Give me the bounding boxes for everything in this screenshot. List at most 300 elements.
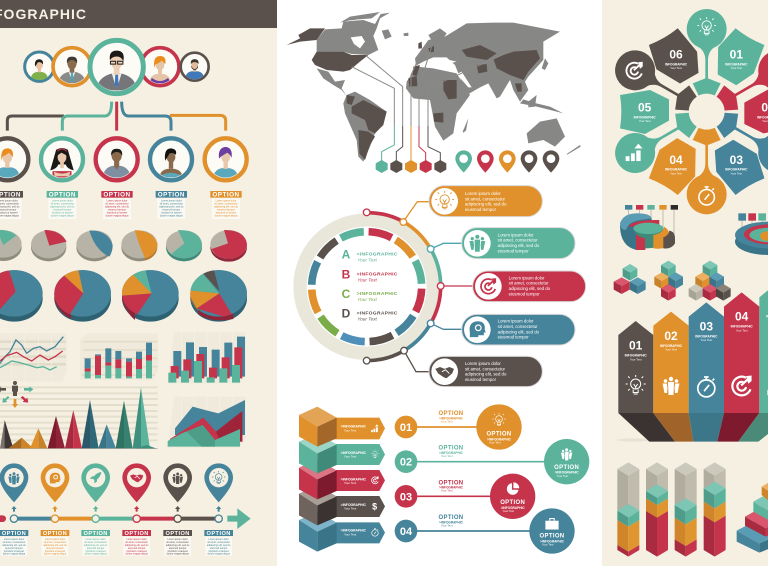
column 03 xyxy=(689,302,724,413)
label 03: 03 xyxy=(730,153,743,167)
legend C xyxy=(342,287,398,302)
large pie 4 xyxy=(190,270,247,322)
timeline option 1: dolore magna aliqua xyxy=(3,553,26,556)
pill: orange: Lorem ipsum dolor xyxy=(465,191,501,196)
avatar: woman small xyxy=(25,52,54,81)
column 01: INFOGRAPHIC xyxy=(625,354,647,358)
option row 03: Your Text xyxy=(441,489,453,493)
timeline option 6: sit amet, consectetur xyxy=(207,541,230,544)
option 1 xyxy=(0,191,23,219)
timeline option 4: sit amet, consectetur xyxy=(125,541,148,544)
option row 04: Your Text xyxy=(441,523,453,527)
pill: brown: Lorem ipsum dolor xyxy=(465,361,501,366)
pill: orange xyxy=(429,186,542,217)
column 02: Your Text xyxy=(665,348,677,352)
arrow label orange xyxy=(335,418,385,439)
option row 03: Your Text xyxy=(503,509,514,513)
pill: orange: eiusmod tempor xyxy=(465,207,497,212)
cube clusters xyxy=(614,261,731,301)
option 2: dolore magna aliqua xyxy=(51,215,74,218)
beige ring xyxy=(300,220,433,353)
ring segments xyxy=(291,211,442,362)
stacked bar chart xyxy=(80,333,158,380)
cube red xyxy=(299,459,337,499)
pill: teal: adipiscing elit, sed do xyxy=(498,243,540,248)
arrow label red: >INFOGRAPHIC xyxy=(341,477,367,481)
arc nodes xyxy=(363,209,444,364)
timeline option 4: OPTION xyxy=(125,531,149,537)
small pie 4 xyxy=(121,230,157,261)
pill: red xyxy=(473,271,586,302)
option 4: tincidunt ut laoreet xyxy=(161,211,182,214)
icon: person with arrows xyxy=(0,381,33,408)
map inland seas xyxy=(420,59,472,87)
map pin brown 2 xyxy=(543,150,559,173)
option row 04: 04 xyxy=(400,526,413,538)
timeline option 6: Lorem ipsum dolor xyxy=(209,538,229,541)
pill: blue: Lorem ipsum dolor xyxy=(498,319,534,324)
map pin brown xyxy=(521,150,537,173)
label 06: Your Text xyxy=(670,66,682,70)
legend A B C D xyxy=(342,247,398,321)
pill: brown xyxy=(429,356,542,387)
connectors xyxy=(403,202,473,372)
radial bar chart right xyxy=(735,213,768,255)
avatar: man with beard xyxy=(181,53,209,81)
pill: teal xyxy=(462,228,575,259)
label 05: Your Text xyxy=(639,119,651,123)
label 02 xyxy=(757,101,768,123)
option row 02: 02 xyxy=(400,457,412,469)
option row 03: 03 xyxy=(400,491,412,503)
legend D: >INFOGRAPHIC xyxy=(357,310,398,316)
option 4: dolore magna aliqua xyxy=(160,215,183,218)
option 2: adipiscing elit, sed do xyxy=(50,205,75,208)
wedge and pin teal top xyxy=(687,9,727,98)
option 3: eiusmod tempor xyxy=(108,208,126,211)
option row 03: OPTION xyxy=(500,500,525,506)
3D bar chart xyxy=(167,332,246,383)
timeline option 5: sit amet, consectetur xyxy=(166,541,189,544)
option row 01: Your Text xyxy=(489,441,501,445)
option row 01: >INFOGRAPHIC xyxy=(439,417,464,421)
pin: worker xyxy=(163,463,192,502)
timeline option 3: sit amet, consectetur xyxy=(84,541,107,544)
option 3: adipiscing elit, sed do xyxy=(105,205,130,208)
arrow label teal: >INFOGRAPHIC xyxy=(341,451,367,455)
timeline option 3: tincidunt ut laoreet xyxy=(86,550,106,553)
timeline option 5: Lorem ipsum dolor xyxy=(168,538,188,541)
timeline option 6: tincidunt ut laoreet xyxy=(209,550,229,553)
stacked 3D bar 1 xyxy=(617,462,639,557)
timeline option 2: adipiscing elit, sed do xyxy=(43,544,67,547)
timeline option 3: Lorem ipsum dolor xyxy=(86,538,106,541)
timeline option 4 xyxy=(122,530,151,556)
legend B: B xyxy=(342,267,351,281)
timeline option 1: adipiscing elit, sed do xyxy=(2,544,26,547)
timeline option labels xyxy=(0,530,233,556)
pill: teal: eiusmod tempor xyxy=(498,248,529,253)
option row 01: OPTION xyxy=(439,411,463,417)
option 4: Lorem ipsum dolor xyxy=(161,199,182,202)
pin: handshake xyxy=(122,463,151,502)
wedge and pin teal left xyxy=(608,101,705,180)
label 04 xyxy=(665,153,688,175)
timeline option 1: eiusmod tempor xyxy=(5,547,23,550)
option 4: sit amet, consectetur xyxy=(160,202,183,205)
map connector lines xyxy=(352,47,513,161)
timeline option 2: OPTION xyxy=(43,531,67,537)
option row 02: OPTION xyxy=(439,445,463,451)
avatar: woman with short black hair xyxy=(150,138,192,180)
panel: hexagon flower diagram xyxy=(608,9,768,301)
option 2: eiusmod tempor xyxy=(53,208,72,211)
arrow label blue: >INFOGRAPHIC xyxy=(341,529,367,533)
column floors xyxy=(618,413,768,442)
option 4: adipiscing elit, sed do xyxy=(159,205,184,208)
legend A xyxy=(342,247,398,263)
option 5 xyxy=(210,191,242,219)
map gray countries xyxy=(317,12,581,162)
option row 04: >INFOGRAPHIC xyxy=(540,540,565,544)
column 04 xyxy=(724,292,759,413)
cube teal xyxy=(299,433,337,473)
avatar: long black hair xyxy=(41,138,83,180)
stepped pyramid xyxy=(737,482,768,553)
option row 04: OPTION xyxy=(439,515,463,521)
label 01: Your Text xyxy=(731,66,742,70)
label 03: Your Text xyxy=(731,171,742,175)
option row 02 xyxy=(395,439,589,484)
large pie charts xyxy=(0,265,247,322)
pin: rocket xyxy=(81,463,110,502)
legend D: D xyxy=(342,306,351,320)
legend A: Your Text xyxy=(357,258,378,263)
option row 03: >INFOGRAPHIC xyxy=(501,506,525,510)
map hexagon markers xyxy=(376,160,446,173)
option 3: sit amet, consectetur xyxy=(105,202,129,205)
timeline option 3: eiusmod tempor xyxy=(87,547,105,550)
option 3: Lorem ipsum dolor xyxy=(107,199,128,202)
legend A: >INFOGRAPHIC xyxy=(357,252,398,258)
option row 03: OPTION xyxy=(439,480,463,486)
option row 02: >INFOGRAPHIC xyxy=(555,471,579,475)
pill: blue xyxy=(462,314,575,345)
pill: brown: eiusmod tempor xyxy=(465,377,497,382)
stacked 3D bar 2 xyxy=(646,462,668,557)
option row 02: Your Text xyxy=(557,474,568,478)
pill: brown: adipiscing elit, sed do xyxy=(465,372,507,377)
option 4: OPTION xyxy=(158,191,185,198)
option row 01: OPTION xyxy=(487,432,511,438)
arrow label red xyxy=(335,470,385,491)
panel: cube stack and options xyxy=(299,404,589,554)
flower icons xyxy=(626,17,716,205)
avatar: dark skinned man xyxy=(96,138,138,180)
timeline option 2: Lorem ipsum dolor xyxy=(45,538,65,541)
small pie 2 xyxy=(31,230,67,261)
label 03 xyxy=(725,153,748,175)
legend D xyxy=(342,306,398,321)
timeline xyxy=(0,506,251,529)
large pie 1 xyxy=(0,265,43,322)
timeline option 5: eiusmod tempor xyxy=(169,547,187,550)
cube cluster 3 xyxy=(689,261,731,301)
map highlighted countries xyxy=(287,28,540,160)
timeline option 2: dolore magna aliqua xyxy=(44,553,67,556)
map pin legend xyxy=(455,150,559,173)
pill: red: Lorem ipsum dolor xyxy=(509,275,545,280)
pill: orange: sit amet, consectetur xyxy=(465,196,505,201)
timeline option 5: dolore magna aliqua xyxy=(167,553,189,556)
legend D: Your Text xyxy=(357,316,378,321)
pin: people xyxy=(0,463,28,502)
option row 02: Your Text xyxy=(441,454,453,458)
arrow label brown: >INFOGRAPHIC xyxy=(341,503,367,507)
pill: blue: sit amet, consectetur xyxy=(498,324,538,329)
timeline option 6: dolore magna aliqua xyxy=(208,553,230,556)
option row 01 xyxy=(395,404,522,450)
option 3 xyxy=(101,191,133,219)
option row 04: >INFOGRAPHIC xyxy=(439,520,464,524)
cube blue xyxy=(299,512,337,552)
label 01: INFOGRAPHIC xyxy=(725,62,748,66)
column 02 xyxy=(653,312,689,413)
pill: red: eiusmod tempor xyxy=(509,291,540,296)
column 04: INFOGRAPHIC xyxy=(731,325,753,329)
avatar: orange haired xyxy=(0,138,28,180)
option 5: adipiscing elit, sed do xyxy=(214,205,239,208)
label 06 xyxy=(665,47,688,70)
timeline option 4: Lorem ipsum dolor xyxy=(127,538,147,541)
column 02: 02 xyxy=(664,329,678,343)
cube cluster 1 xyxy=(614,264,646,294)
panel: arrow columns and stacked bars xyxy=(617,283,768,557)
label 04: 04 xyxy=(669,153,683,167)
petals xyxy=(620,25,768,198)
label 06: 06 xyxy=(669,47,683,61)
large pie 2 xyxy=(54,270,111,322)
option 5: eiusmod tempor xyxy=(217,208,235,211)
pill: blue: adipiscing elit, sed do xyxy=(498,329,540,334)
label 04: Your Text xyxy=(670,171,682,175)
arrow label teal: Your Text xyxy=(344,455,356,459)
cube stack xyxy=(299,407,337,552)
arrow label teal xyxy=(335,444,385,465)
timeline option 3 xyxy=(81,530,110,556)
timeline option 5: OPTION xyxy=(166,531,190,537)
avatar: woman with orange hair xyxy=(141,48,179,86)
legend B: Your Text xyxy=(357,277,378,282)
legend B: >INFOGRAPHIC xyxy=(357,271,398,277)
legend A: A xyxy=(342,247,351,261)
option 5: Lorem ipsum dolor xyxy=(216,199,237,202)
label 04: INFOGRAPHIC xyxy=(665,168,688,172)
option 5: OPTION xyxy=(212,191,240,198)
timeline option 3: OPTION xyxy=(84,531,108,537)
arrow label blue: Your Text xyxy=(344,532,356,536)
arrow label orange: Your Text xyxy=(344,428,356,432)
column 04: Your Text xyxy=(736,328,748,332)
timeline option 4: dolore magna aliqua xyxy=(126,553,148,556)
pill: orange: adipiscing elit, sed do xyxy=(465,202,507,207)
small pie 6 xyxy=(210,230,247,262)
pin: bulb xyxy=(204,463,233,502)
pill: red: adipiscing elit, sed do xyxy=(509,286,551,291)
option 3: tincidunt ut laoreet xyxy=(107,211,128,214)
option row 02: OPTION xyxy=(554,465,579,471)
timeline option 6 xyxy=(204,530,233,556)
label 05: 05 xyxy=(638,101,652,115)
timeline option 4: tincidunt ut laoreet xyxy=(127,550,147,553)
column 03: INFOGRAPHIC xyxy=(695,334,718,338)
option 2: OPTION xyxy=(49,191,76,198)
location pins xyxy=(0,463,233,502)
cube orange xyxy=(299,407,337,447)
arrow labels xyxy=(335,418,385,543)
legend C: >INFOGRAPHIC xyxy=(357,291,398,297)
option row 02: >INFOGRAPHIC xyxy=(439,451,464,455)
option 2: Lorem ipsum dolor xyxy=(52,199,73,202)
peak chart xyxy=(0,387,158,449)
legend C: C xyxy=(342,287,351,301)
label 01 xyxy=(725,47,748,70)
timeline option 5 xyxy=(163,530,192,556)
option 4 xyxy=(156,191,187,219)
column 01: Your Text xyxy=(630,357,642,361)
small pie charts xyxy=(0,230,247,262)
arrow label brown: $ xyxy=(372,502,377,512)
stacked 3D bar 3 xyxy=(675,462,697,557)
centre circle xyxy=(689,94,725,130)
column 01: 01 xyxy=(629,338,643,352)
label 06: INFOGRAPHIC xyxy=(665,62,688,66)
stacked 3D bar 4 xyxy=(704,462,726,557)
large pie 3 xyxy=(122,270,179,322)
arrow label orange: >INFOGRAPHIC xyxy=(341,425,367,429)
pin: head xyxy=(41,463,69,502)
option row 01: >INFOGRAPHIC xyxy=(487,437,512,441)
map pin red xyxy=(477,150,494,173)
map pin orange xyxy=(499,150,516,173)
flower labels xyxy=(634,47,768,175)
label 05: INFOGRAPHIC xyxy=(634,115,656,119)
column shadow xyxy=(617,438,650,442)
option labels row xyxy=(0,191,242,219)
panel: organisation chart xyxy=(0,40,247,219)
map pin teal xyxy=(455,150,472,173)
panel: charts and timeline xyxy=(0,230,251,556)
timeline option 5: tincidunt ut laoreet xyxy=(168,550,188,553)
line chart xyxy=(0,333,67,382)
small pie 3 xyxy=(76,230,113,261)
option row 04 xyxy=(395,508,575,554)
avatar: purple hair xyxy=(205,138,247,180)
legend B xyxy=(342,267,398,282)
avatar: manager with glasses xyxy=(90,40,143,94)
legend C: Your Text xyxy=(357,297,378,302)
option 5: tincidunt ut laoreet xyxy=(216,211,237,214)
timeline option 5: adipiscing elit, sed do xyxy=(166,544,190,547)
label 05 xyxy=(634,101,656,123)
option row 04: OPTION xyxy=(540,534,564,540)
timeline option 1: Lorem ipsum dolor xyxy=(4,538,24,541)
option 5: dolore magna aliqua xyxy=(215,215,238,218)
option row 01: Your Text xyxy=(441,420,453,424)
timeline option 2 xyxy=(41,530,69,556)
cube brown xyxy=(299,485,337,525)
arrow label brown xyxy=(335,496,385,517)
pill: red: sit amet, consectetur xyxy=(509,281,549,286)
wedge and pin blue xyxy=(708,101,768,180)
option 5: sit amet, consectetur xyxy=(214,202,238,205)
column 05 xyxy=(759,283,768,413)
timeline option 3: adipiscing elit, sed do xyxy=(84,544,108,547)
label 01: 01 xyxy=(730,47,743,61)
timeline option 4: eiusmod tempor xyxy=(128,547,146,550)
pill: blue: eiusmod tempor xyxy=(498,335,529,340)
arrow label brown: Your Text xyxy=(344,507,356,511)
avatar: man in suit xyxy=(53,48,91,86)
column 01 xyxy=(618,321,653,413)
timeline option 1: sit amet, consectetur xyxy=(3,541,25,544)
pill: teal: Lorem ipsum dolor xyxy=(498,232,534,237)
outer coloured arc xyxy=(367,213,441,361)
panel: world map xyxy=(287,12,581,173)
column 02: INFOGRAPHIC xyxy=(660,344,683,348)
timeline option 1: tincidunt ut laoreet xyxy=(4,550,24,553)
timeline option 1: OPTION xyxy=(2,531,26,537)
column 03: Your Text xyxy=(701,338,712,342)
timeline option 6: adipiscing elit, sed do xyxy=(207,544,231,547)
option 2: sit amet, consectetur xyxy=(51,202,74,205)
pill: teal: sit amet, consectetur xyxy=(498,238,538,243)
option 2: tincidunt ut laoreet xyxy=(52,211,73,214)
timeline option 6: OPTION xyxy=(207,531,231,537)
option 3: OPTION xyxy=(103,191,131,198)
timeline option 2: eiusmod tempor xyxy=(46,547,64,550)
option row 04: Your Text xyxy=(542,543,554,547)
map hudson bay xyxy=(351,36,365,48)
timeline option 6: eiusmod tempor xyxy=(210,547,228,550)
option 3: dolore magna aliqua xyxy=(106,215,129,218)
avatars row 2 xyxy=(0,138,247,180)
timeline option 3: dolore magna aliqua xyxy=(85,553,107,556)
timeline option 1 xyxy=(0,530,28,556)
wedge and pin red xyxy=(708,43,768,122)
timeline option 2: tincidunt ut laoreet xyxy=(45,550,65,553)
label 03: INFOGRAPHIC xyxy=(725,168,748,172)
option 2 xyxy=(47,191,78,219)
small pie 5 xyxy=(166,230,202,261)
column 04: 04 xyxy=(735,310,749,324)
option row 01: 01 xyxy=(400,422,412,434)
arrow label blue xyxy=(335,522,385,543)
wedge and pin orange xyxy=(687,125,727,214)
option row 03 xyxy=(395,474,535,519)
small pie 1 xyxy=(0,230,22,261)
option row 03: >INFOGRAPHIC xyxy=(439,486,464,490)
pill: brown: sit amet, consectetur xyxy=(465,366,505,371)
3D area chart xyxy=(168,397,246,448)
timeline option 2: sit amet, consectetur xyxy=(44,541,66,544)
wedge and pin brown xyxy=(608,43,705,122)
radial bar chart left xyxy=(620,205,678,250)
cube cluster 2 xyxy=(654,261,683,301)
timeline option 4: adipiscing elit, sed do xyxy=(125,544,149,547)
option 4: eiusmod tempor xyxy=(162,208,181,211)
header bar xyxy=(0,0,277,28)
